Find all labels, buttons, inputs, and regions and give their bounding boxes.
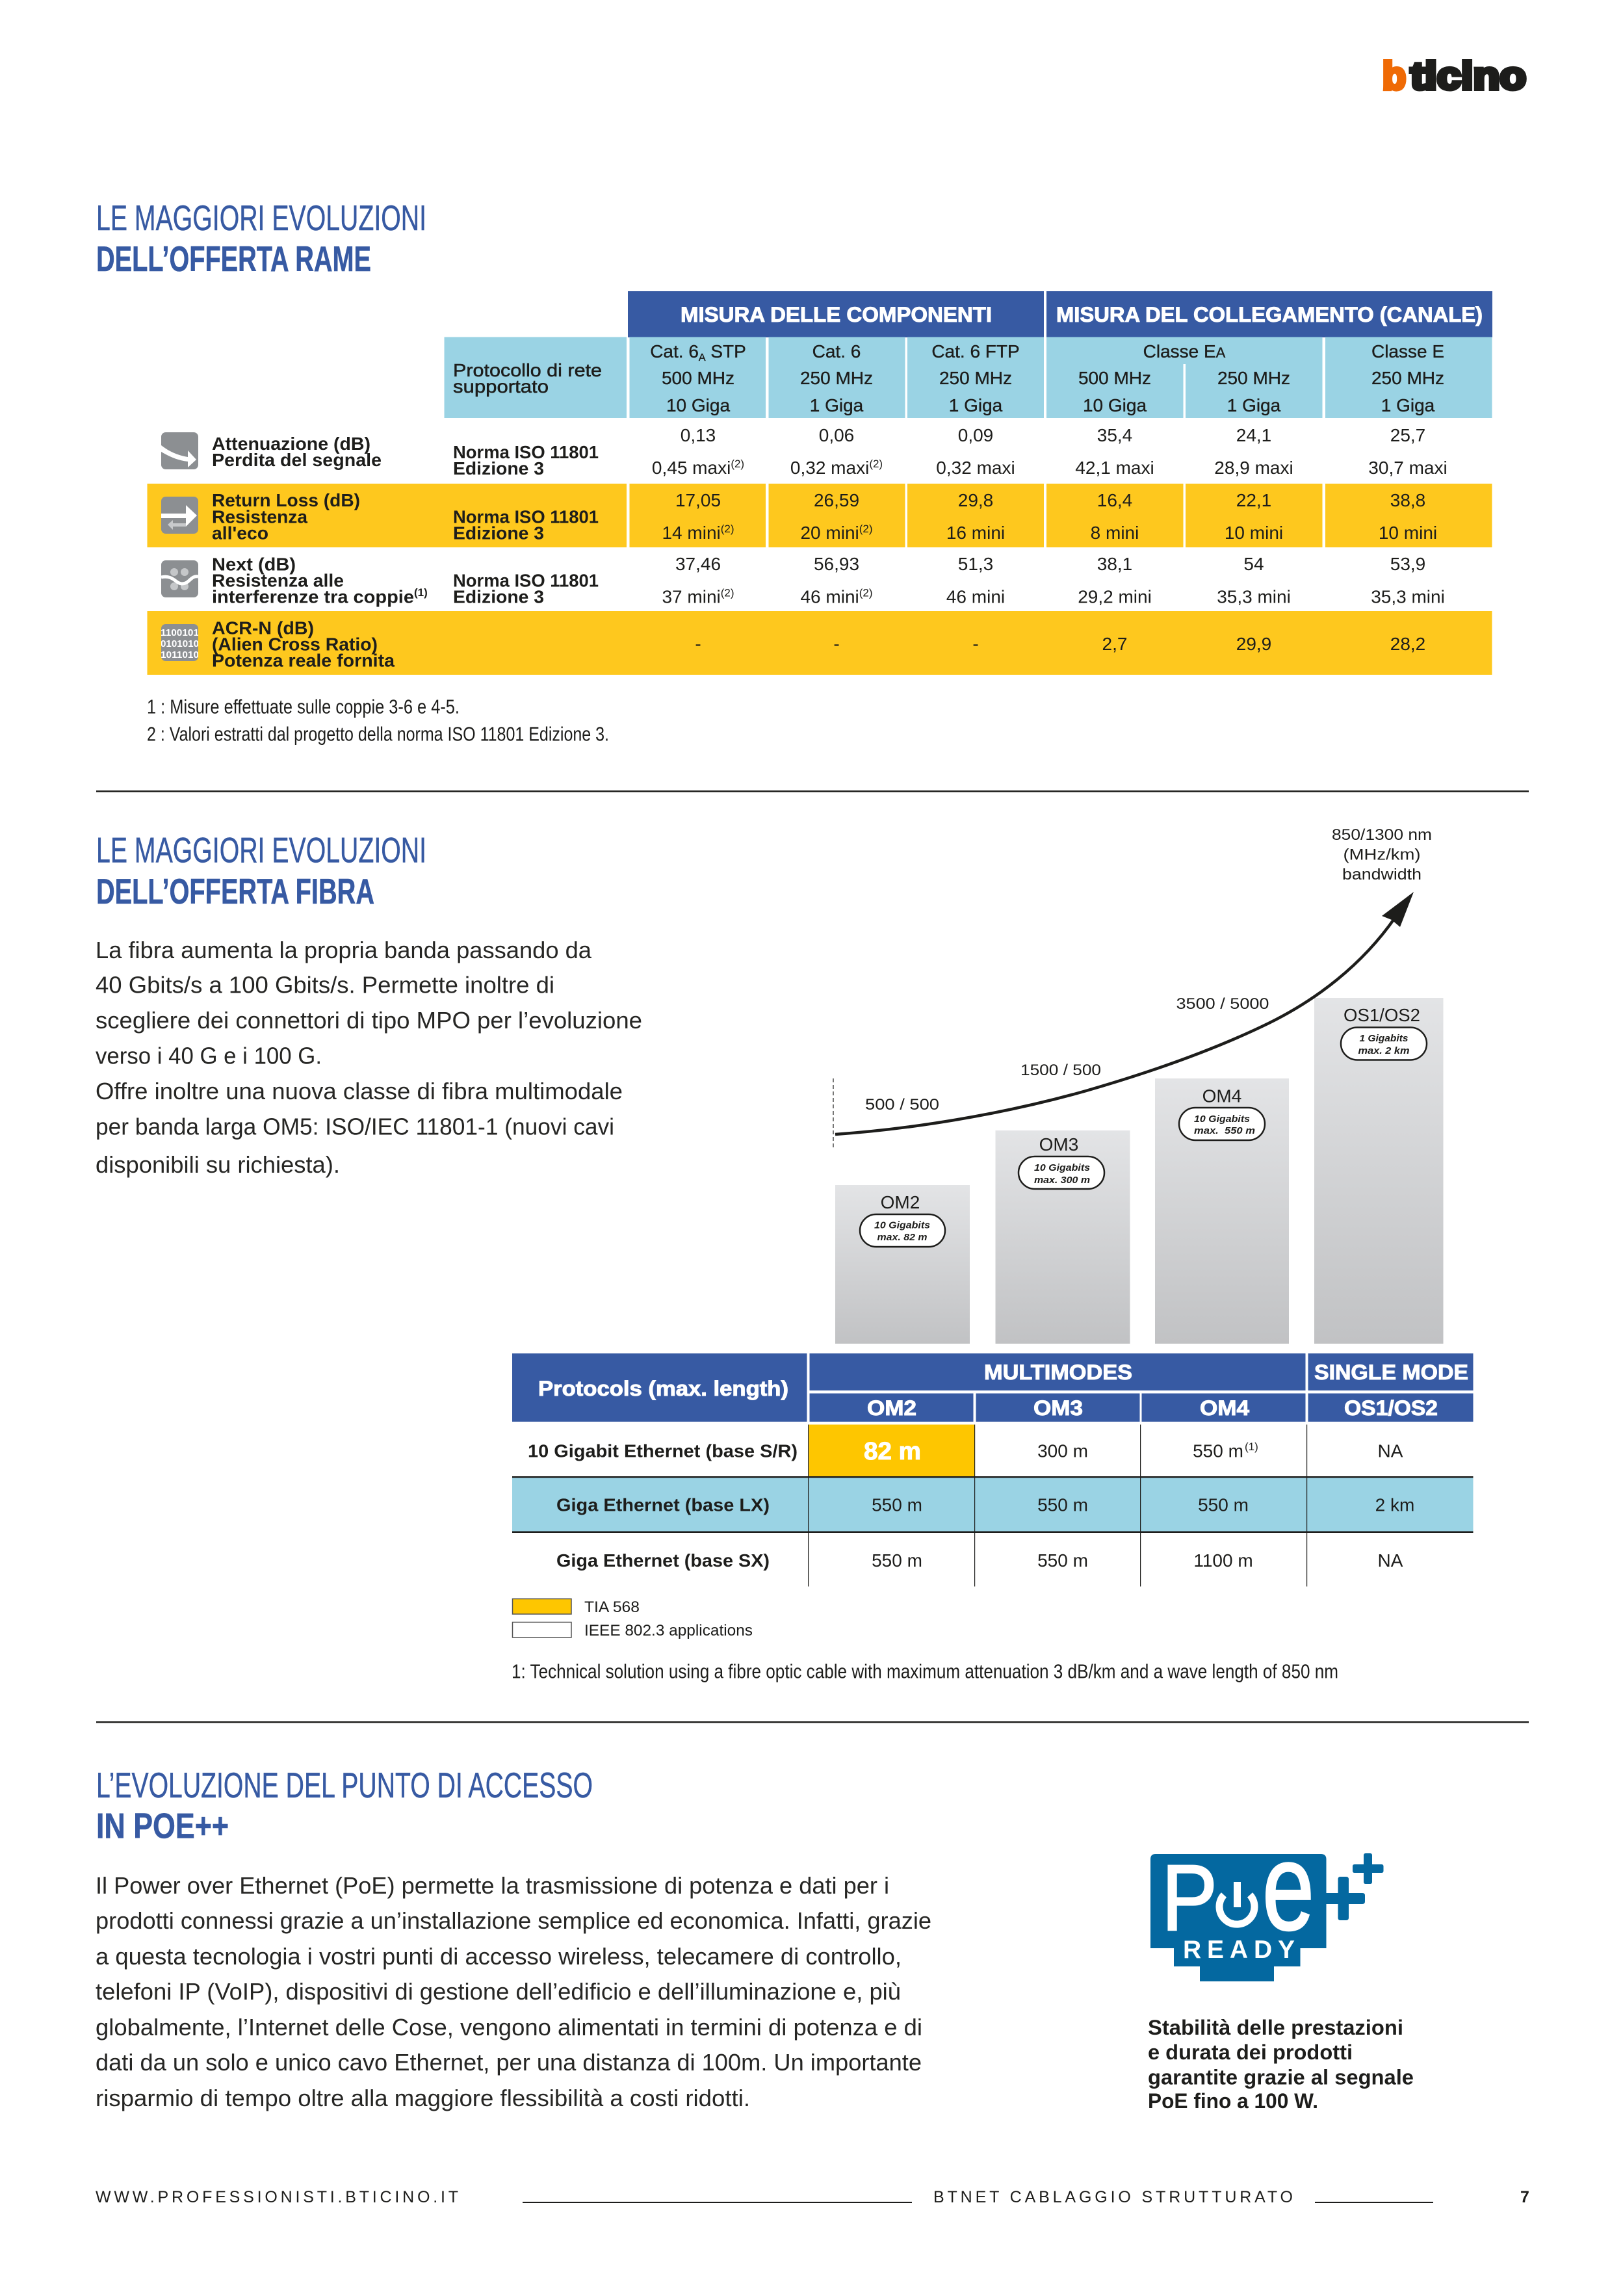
icon: return loss arrows (161, 497, 198, 534)
bar: OM2 (835, 1185, 970, 1344)
table rows: NA (1378, 1441, 1403, 1461)
row: Attenuazione: 0,32 maxi (936, 458, 1015, 478)
row: Attenuazione: 42,1 maxi (1075, 458, 1154, 478)
row: Return Loss: 10 mini (1379, 523, 1437, 543)
table sub-header: light blue cells: 1 Giga (1381, 395, 1435, 415)
row: Return Loss: (2) (721, 523, 734, 535)
text block: PoE: telefoni IP (VoIP), dispositivi di gestione dell’edificio e dell’illuminazione e, più (96, 1978, 901, 2005)
table sub-header: light blue cells: STP (706, 341, 746, 361)
row: ACR-N: - (972, 634, 979, 654)
arrow: bandwidth curve (833, 892, 1414, 1147)
heading: PoE (96, 1765, 593, 1846)
row: Attenuazione: 0,06 (819, 425, 854, 445)
table rows: (1) (1245, 1441, 1258, 1453)
text block: fibra: Offre inoltre una nuova classe di fibra multimodale (96, 1078, 623, 1104)
logo: bticino: b (1383, 55, 1406, 98)
footer: BTNET CABLAGGIO STRUTTURATO (933, 2188, 1293, 2206)
icon: binary digits (161, 624, 199, 661)
row: Next: Resistenza alle (212, 571, 344, 590)
table header: OS1/OS2 (1344, 1396, 1438, 1420)
table sub-header: light blue cells: Cat. 6 FTP (931, 341, 1020, 361)
row: Next: Next (dB) (212, 554, 296, 575)
row: Attenuazione: 24,1 (1236, 425, 1271, 445)
footer (96, 2188, 1529, 2206)
row: Next: (2) (721, 586, 734, 599)
footnote: fibre table: 1: Technical solution using a fibre optic cable with maximum attenuation 3 dB/km and a wave length of 850 nm (512, 1660, 1338, 1682)
table rows: 550 m (1037, 1550, 1088, 1571)
heading: PoE: L’EVOLUZIONE DEL PUNTO DI ACCESSO (96, 1765, 593, 1805)
text block: PoE: Il Power over Ethernet (PoE) permette la trasmissione di potenza e dati per i (96, 1872, 889, 1899)
table rows: 10 Gigabit Ethernet (base S/R) (528, 1441, 798, 1461)
chart: fibre bandwidth bars (833, 826, 1443, 1344)
text block: PoE: risparmio di tempo oltre alla maggiore flessibilità a costi ridotti. (96, 2085, 750, 2111)
row: Return Loss: Edizione 3 (453, 523, 544, 543)
row: Attenuazione: 0,09 (958, 425, 993, 445)
table rows: 1100 m (1193, 1550, 1253, 1571)
row: Next: 51,3 (958, 554, 993, 574)
table header: blue bands (628, 291, 1492, 337)
table header: OM3 (1033, 1396, 1083, 1420)
row: Attenuazione: (2) (869, 458, 883, 470)
bar: OS1/OS2: 1 Gigabits (1360, 1033, 1408, 1044)
text block: fibra: scegliere dei connettori di tipo MPO per l’evoluzione (96, 1007, 642, 1034)
table rows: 550 m (1198, 1495, 1249, 1515)
row: Next: 35,3 mini (1217, 586, 1291, 607)
table sub-header: light blue cells: 1 Giga (1227, 395, 1281, 415)
table header (512, 1353, 1473, 1422)
heading: fibra: LE MAGGIORI EVOLUZIONI (96, 829, 426, 870)
text block: fibra: 40 Gbits/s a 100 Gbits/s. Permette inoltre di (96, 971, 554, 998)
logo: PoE ready: READY (1183, 1936, 1295, 1964)
chart labels: 500 / 500 (865, 1096, 939, 1114)
row: Next: (1) (414, 586, 428, 599)
caption: PoE benefits: garantite grazie al segnale (1148, 2066, 1414, 2089)
table sub-header: light blue cells: 250 MHz (800, 368, 873, 388)
row: Next: 35,3 mini (1371, 586, 1445, 607)
row: Return Loss: (2) (859, 523, 873, 535)
row: Return Loss: 22,1 (1236, 490, 1271, 510)
icon: attenuation arrow (161, 432, 198, 469)
row: Next: 37,46 (675, 554, 721, 574)
text block: PoE: prodotti connessi grazie a un’installazione semplice ed economica. Infatti, grazie (96, 1907, 931, 1934)
table header: OM4 (1200, 1396, 1249, 1420)
text block: PoE: a questa tecnologia i vostri punti di accesso wireless, telecamere di controllo, (96, 1943, 902, 1970)
bar: OM4: 10 Gigabits (1194, 1114, 1250, 1125)
row: Return Loss: 16,4 (1097, 490, 1132, 510)
bar: OM4: OM4 (1202, 1086, 1241, 1106)
bar: OM4 (1155, 1078, 1289, 1344)
icon: binary digits: 1100101 (161, 627, 199, 638)
table sub-header: light blue cells (445, 337, 1492, 418)
row: Return Loss: 16 mini (946, 523, 1005, 543)
row: ACR-N: (Alien Cross Ratio) (212, 634, 378, 654)
table rows: 550 m (1037, 1495, 1088, 1515)
row: ACR-N: Potenza reale fornita (212, 650, 395, 671)
row: Attenuazione: Norma ISO 11801 (453, 442, 599, 462)
footer: 7 (1520, 2188, 1529, 2206)
panel: fibre protocols table (512, 1353, 1473, 1586)
row: ACR-N: 28,2 (1390, 634, 1425, 654)
bar: OM2: 10 Gigabits (874, 1220, 930, 1231)
table rows: NA (1378, 1550, 1403, 1571)
row: Attenuazione: 28,9 maxi (1214, 458, 1293, 478)
row: Attenuazione: Edizione 3 (453, 458, 544, 478)
chart labels: 3500 / 5000 (1176, 995, 1269, 1013)
chart labels (865, 826, 1432, 1114)
text block: fibra (96, 937, 642, 1178)
table header: blue bands: MISURA DELLE COMPONENTI (681, 303, 992, 326)
caption: PoE benefits (1148, 2016, 1414, 2113)
table sub-header: light blue cells: 500 MHz (1078, 368, 1151, 388)
row: Return Loss: 26,59 (814, 490, 859, 510)
bar: OM4: max. 550 m (1194, 1125, 1255, 1136)
table rows: Giga Ethernet (base SX) (556, 1550, 770, 1571)
row: Next: 53,9 (1390, 554, 1425, 574)
table sub-header: light blue cells: A (699, 352, 706, 363)
heading: rame: LE MAGGIORI EVOLUZIONI (96, 198, 426, 238)
table rows: Giga Ethernet (base LX) (556, 1495, 770, 1515)
table sub-header: light blue cells: Cat. 6 (812, 341, 861, 361)
heading: fibra: DELL’OFFERTA FIBRA (96, 871, 374, 911)
row: Return Loss: 8 mini (1091, 523, 1139, 543)
heading: rame: DELL’OFFERTA RAME (96, 239, 371, 279)
row: Attenuazione (161, 425, 1448, 478)
row: Next: 38,1 (1097, 554, 1132, 574)
table rows: 550 m (872, 1550, 922, 1571)
heading: rame (96, 198, 426, 279)
row: ACR-N (147, 611, 1492, 675)
footnotes: copper table (147, 696, 609, 745)
row: ACR-N: ACR-N (dB) (212, 618, 314, 638)
row: Attenuazione: Attenuazione (dB) (212, 434, 370, 454)
row: ACR-N: - (833, 634, 840, 654)
text block: fibra: per banda larga OM5: ISO/IEC 11801-1 (nuovi cavi (96, 1113, 614, 1140)
caption: PoE benefits: e durata dei prodotti (1148, 2041, 1353, 2064)
row: Attenuazione: 25,7 (1390, 425, 1425, 445)
text block: PoE: dati da un solo e unico cavo Ethernet, per una distanza di 100m. Un importante (96, 2049, 922, 2076)
bar: OM3 (996, 1130, 1130, 1344)
logo: bticino: ticino (1410, 55, 1526, 98)
row: Attenuazione: 35,4 (1097, 425, 1132, 445)
row: Attenuazione: 0,13 (681, 425, 716, 445)
logo: PoE ready: P (1162, 1846, 1217, 1950)
icon: binary digits: 1011010 (161, 649, 199, 660)
row: Next: 29,2 mini (1078, 586, 1152, 607)
legend: TIA 568 (584, 1598, 640, 1616)
text block: fibra: disponibili su richiesta). (96, 1151, 340, 1178)
row: Return Loss: 20 mini (800, 523, 859, 543)
row: Return Loss: Return Loss (dB) (212, 490, 360, 510)
row: Next: Norma ISO 11801 (453, 571, 599, 590)
logo: PoE ready: e (1262, 1818, 1314, 1956)
row: Next: 37 mini (662, 586, 721, 607)
bar: OS1/OS2 (1314, 998, 1443, 1344)
row: ACR-N: 2,7 (1102, 634, 1127, 654)
table sub-header: light blue cells: 1 Giga (949, 395, 1003, 415)
bar: OS1/OS2: max. 2 km (1358, 1045, 1409, 1056)
table sub-header: light blue cells: Classe EA (1143, 341, 1226, 361)
heading: fibra (96, 829, 426, 911)
bar: OM3: max. 300 m (1034, 1175, 1090, 1186)
logo: PoE ready (1150, 1818, 1383, 1981)
bar: OM3: OM3 (1039, 1134, 1078, 1155)
table rows (512, 1425, 1473, 1586)
row: Return Loss (147, 484, 1492, 547)
row: Attenuazione: 30,7 maxi (1368, 458, 1448, 478)
table rows: 550 m (1193, 1441, 1243, 1461)
text block: PoE (96, 1872, 931, 2111)
table rows: 300 m (1037, 1441, 1088, 1461)
row: Return Loss: 14 mini (662, 523, 721, 543)
table header: Protocols (max. length) (538, 1377, 788, 1400)
icon: interference wave (161, 560, 198, 597)
footnotes: copper table: 1 : Misure effettuate sulle coppie 3-6 e 4-5. (147, 696, 460, 718)
row: Return Loss: Resistenza (212, 507, 307, 527)
table sub-header: light blue cells: 250 MHz (939, 368, 1012, 388)
legend (512, 1598, 753, 1639)
table sub-header: light blue cells: Classe E (1371, 341, 1444, 361)
chart labels: 850/1300 nm (1332, 826, 1432, 844)
table sub-header: light blue cells: supportato (453, 376, 549, 397)
row: Next: 56,93 (814, 554, 859, 574)
row: Return Loss: 10 mini (1225, 523, 1283, 543)
table sub-header: light blue cells: 10 Giga (1083, 395, 1147, 415)
table sub-header: light blue cells: Cat. 6 (650, 341, 699, 361)
icon: binary digits: 0101010 (161, 638, 199, 649)
row: Next: 46 mini (946, 586, 1005, 607)
row: Next: 46 mini (800, 586, 859, 607)
table rows: 82 m (864, 1438, 921, 1465)
row: Next: 54 (1243, 554, 1264, 574)
row: Attenuazione: 0,45 maxi (652, 458, 731, 478)
legend: IEEE 802.3 applications (584, 1622, 753, 1639)
table header: SINGLE MODE (1314, 1361, 1468, 1384)
row: ACR-N: - (695, 634, 701, 654)
row: Attenuazione: Perdita del segnale (212, 450, 382, 470)
bar: OM2: OM2 (881, 1192, 920, 1212)
bar: OS1/OS2: OS1/OS2 (1344, 1005, 1420, 1025)
panel: copper table (147, 291, 1492, 675)
table sub-header: light blue cells: 10 Giga (666, 395, 730, 415)
row: Next (161, 554, 1445, 607)
text block: fibra: verso i 40 G e i 100 G. (96, 1043, 322, 1069)
table sub-header: light blue cells: 1 Giga (810, 395, 864, 415)
table rows: 550 m (872, 1495, 922, 1515)
table sub-header: light blue cells: 250 MHz (1371, 368, 1444, 388)
table header: blue bands: MISURA DEL COLLEGAMENTO (CANALE) (1056, 303, 1483, 326)
row: Return Loss: 38,8 (1390, 490, 1425, 510)
table header: MULTIMODES (984, 1361, 1132, 1384)
bar: OM3: 10 Gigabits (1034, 1162, 1090, 1173)
row: Next: (2) (859, 586, 873, 599)
row: Attenuazione: 0,32 maxi (790, 458, 869, 478)
row: ACR-N: 29,9 (1236, 634, 1271, 654)
chart labels: bandwidth (1342, 866, 1422, 883)
row: Next: interferenze tra coppie (212, 586, 414, 607)
row: Next: Edizione 3 (453, 586, 544, 607)
caption: PoE benefits: Stabilità delle prestazioni (1148, 2016, 1403, 2039)
table sub-header: light blue cells: 250 MHz (1217, 368, 1290, 388)
footnotes: copper table: 2 : Valori estratti dal progetto della norma ISO 11801 Edizione 3. (147, 723, 609, 745)
row: Return Loss: 29,8 (958, 490, 993, 510)
bar: OM2: max. 82 m (877, 1232, 927, 1243)
chart labels: (MHz/km) (1343, 846, 1421, 863)
text block: PoE: globalmente, l’Internet delle Cose, vengono alimentati in termini di potenza e di (96, 2014, 922, 2041)
table sub-header: light blue cells: 500 MHz (662, 368, 734, 388)
heading: PoE: IN POE++ (96, 1806, 229, 1846)
footer: WWW.PROFESSIONISTI.BTICINO.IT (96, 2188, 458, 2206)
chart labels: 1500 / 500 (1020, 1062, 1101, 1079)
row: Attenuazione: (2) (731, 458, 744, 470)
table rows: 2 km (1375, 1495, 1414, 1515)
row: Return Loss: all'eco (212, 523, 268, 543)
caption: PoE benefits: PoE fino a 100 W. (1148, 2089, 1318, 2113)
table header: OM2 (867, 1396, 916, 1420)
table sub-header: light blue cells: Protocollo di rete (453, 360, 602, 380)
row: Return Loss: 17,05 (675, 490, 721, 510)
row: Return Loss: Norma ISO 11801 (453, 507, 599, 527)
text block: fibra: La fibra aumenta la propria banda passando da (96, 937, 592, 963)
